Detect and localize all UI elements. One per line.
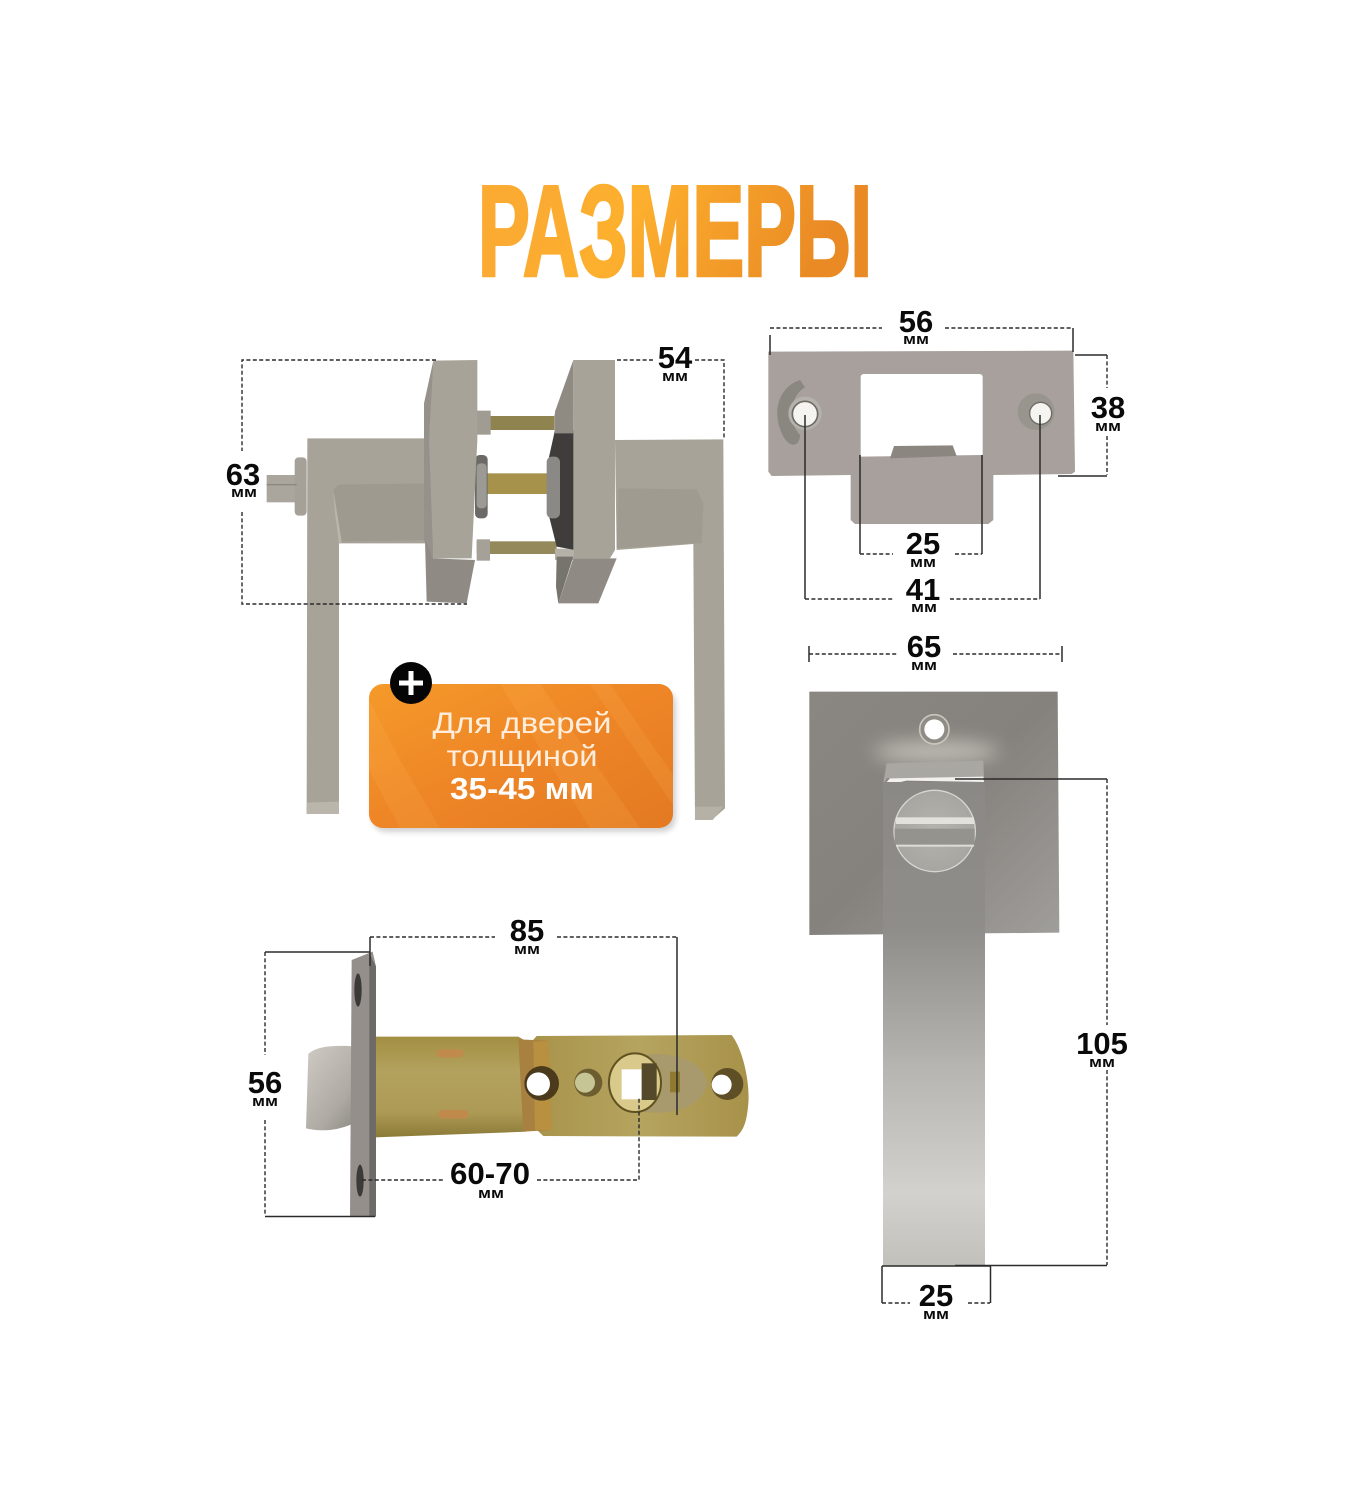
dimension: latch length 85 mm [370,913,677,1115]
latch bolt [306,1046,371,1130]
dimension: backset 60-70 mm [362,1098,639,1202]
dimension: handle width 54 mm: мм [662,368,688,385]
glow around hole [873,742,1000,762]
dimension: lever length 105 mm: 105 [1076,1026,1128,1061]
dimension: latch plate 56 mm [248,952,375,1216]
photo: square rose with privacy lever [809,692,1059,935]
dimension: latch length 85 mm: 85 [510,913,544,948]
callout text: толщиной [446,740,598,773]
callout text [432,707,612,806]
left screw [777,380,822,445]
dimension: strike window 25 mm: мм [910,554,936,571]
photo: thumb turn [894,790,975,872]
dimension: rose width 65 mm [809,629,1062,674]
icon: plus [390,662,432,704]
dimension: strike width 56 mm: мм [903,331,929,348]
dimension: handle height 63 mm [226,360,467,604]
latch front case [375,1037,530,1137]
dimension: handle height 63 mm: 63 [226,457,260,492]
latch collar [518,1039,552,1132]
dimension: lever width 25 mm [882,1266,990,1323]
dimension: strike width 56 mm [770,304,1073,355]
dimension: strike width 56 mm: 56 [899,304,933,339]
dimension: lever width 25 mm: мм [923,1306,949,1323]
dimension: backset 60-70 mm: мм [478,1185,504,1202]
dimension: strike window 25 mm [860,455,982,571]
photo: lever blade [883,782,985,1266]
dimension: lever length 105 mm [955,779,1128,1266]
dimension: handle width 54 mm [617,340,724,438]
title: РАЗМЕРЫ [478,160,872,304]
photo: latch mechanism [306,952,749,1217]
right screw [1018,393,1054,430]
case tabs [437,1049,468,1119]
dimension: handle height 63 mm: мм [231,484,257,501]
callout text: 35-45 мм [450,771,594,806]
dimension: lever length 105 mm: мм [1089,1054,1115,1071]
left lever [267,438,430,814]
connecting screws and spindle [475,411,575,561]
latch face plate [350,952,376,1217]
mounting hole [920,715,949,744]
dimension: latch plate 56 mm: 56 [248,1065,282,1100]
lever top [883,761,984,786]
callout panel [369,684,673,828]
dimension: strike screws 41 mm [805,415,1040,616]
dimension: strike height 38 mm [1058,355,1125,476]
dimension: strike screws 41 mm: 41 [906,572,940,607]
dimension: backset 60-70 mm: 60-70 [450,1156,530,1191]
photo: pair of lever handles [267,360,725,820]
dimension: strike height 38 mm: 38 [1091,390,1125,425]
dimension: strike window 25 mm: 25 [906,526,940,561]
dimension: lever width 25 mm: 25 [919,1278,953,1313]
callout shadow [372,690,676,832]
dimension: handle width 54 mm: 54 [658,340,693,375]
photo: strike plate [768,351,1075,524]
callout: door thickness [369,662,676,832]
dimension: latch length 85 mm: мм [514,941,540,958]
dimension: rose width 65 mm: мм [911,657,937,674]
dimension: rose width 65 mm: 65 [907,629,941,664]
strike tab [890,445,957,458]
left rose plate [424,360,477,603]
dimension: strike height 38 mm: мм [1095,418,1121,435]
case holes [524,1053,743,1113]
dimension: latch plate 56 mm: мм [252,1093,278,1110]
right rose plate [555,360,617,603]
latch rear case [530,1035,749,1137]
dimension: strike screws 41 mm: мм [911,599,937,616]
right lever [615,439,725,820]
strike window [861,374,983,457]
callout highlights [369,684,673,828]
callout text: Для дверей [432,707,612,740]
